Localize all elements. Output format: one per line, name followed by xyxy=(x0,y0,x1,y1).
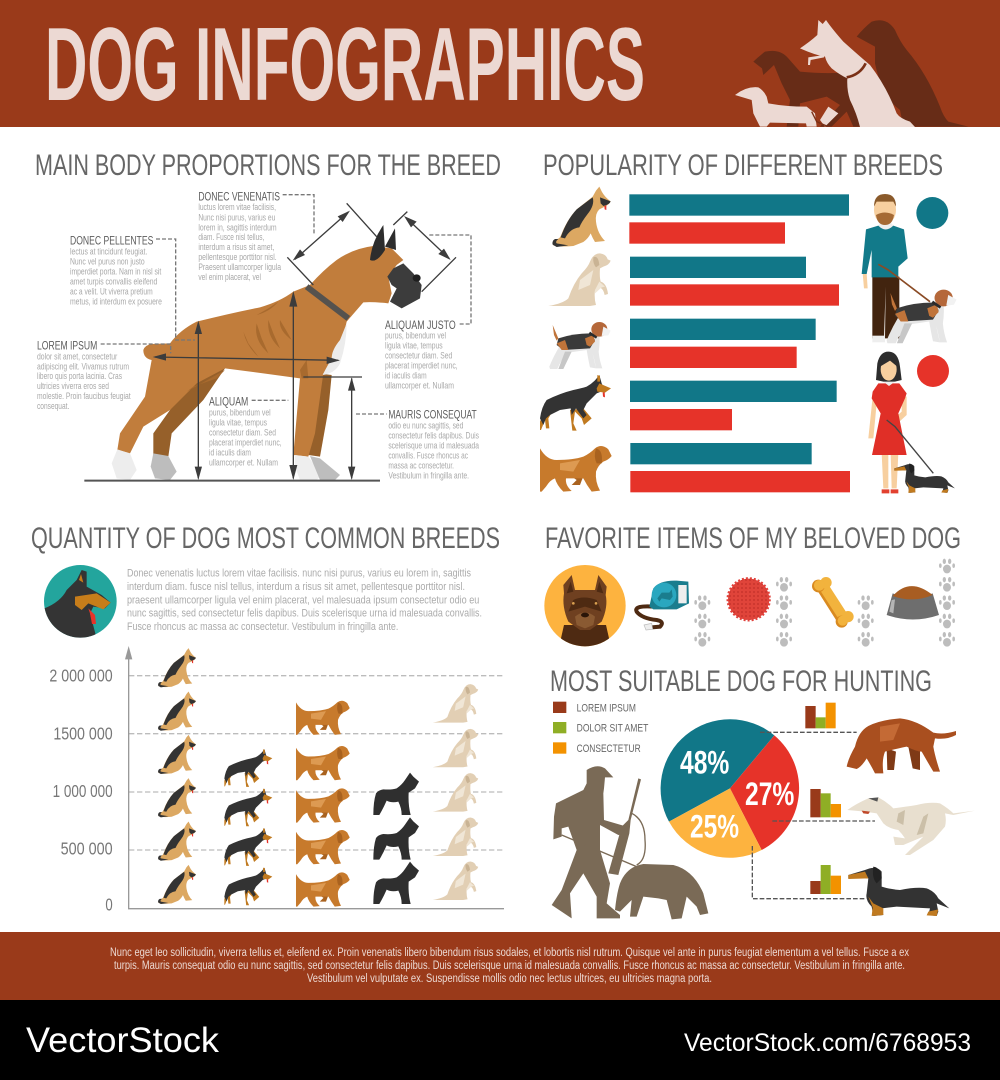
callout: aliquam justo: id iaculis diam xyxy=(385,370,427,380)
mini bar chart: greyhound xyxy=(810,789,841,817)
icon: doberman head xyxy=(40,565,117,640)
callout: mauris consequat: scelerisque urna id malesuada xyxy=(388,440,479,450)
callout: lorem ipsum xyxy=(37,339,131,411)
callout: aliquam: id iaculis diam xyxy=(209,447,251,457)
callout: donec pellentes: Nunc vel purus non justo xyxy=(70,256,145,266)
panel: body proportions diagram xyxy=(37,191,479,481)
panel: quantity of breeds xyxy=(40,565,504,914)
callout: lorem ipsum: ultricies viverra eros sed xyxy=(37,381,109,391)
pictogram: shepherds xyxy=(158,648,196,904)
legend xyxy=(553,702,648,755)
axis labels: 500 000 xyxy=(61,839,113,859)
callout: aliquam justo: consectetur diam. Sed xyxy=(385,350,452,360)
pie chart: 27% xyxy=(745,775,794,812)
callout: aliquam: ullamcorper et. Nullam xyxy=(209,457,278,467)
text block: nunc sagittis, sed consectetur felis dapibus. Duis scelerisque urna id malesuada convallis. xyxy=(127,608,482,620)
footer band: Vestibulum vel vulputate ex. Suspendisse mollis odio nec lectus ultrices, eu ultricies magna porta. xyxy=(307,973,712,985)
callout: donec pellentes xyxy=(70,235,162,306)
callout: lorem ipsum: dolor sit amet, consectetur xyxy=(37,351,117,361)
watermark bar: VectorStock.com/6768953 xyxy=(684,1029,971,1057)
callout: aliquam: ALIQUAM xyxy=(209,396,248,409)
callout: donec pellentes: ac a velit. Ut viverra pretium xyxy=(70,286,153,296)
callout: aliquam: ligula vitae, tempus xyxy=(209,418,267,428)
boxer dog xyxy=(112,225,422,480)
callout: mauris consequat: odio eu nunc sagittis, sed xyxy=(388,421,463,431)
header banner xyxy=(0,0,1000,127)
legend circle: men xyxy=(916,197,948,229)
icon: dog silhouettes xyxy=(735,20,968,127)
mini bar chart: dachshund xyxy=(810,865,841,894)
callout: aliquam justo: ligula vitae, tempus xyxy=(385,340,443,350)
watermark bar: VectorStock xyxy=(26,1021,220,1060)
pie chart xyxy=(661,719,799,858)
callout: aliquam justo: purus, bibendum vel xyxy=(385,330,446,340)
callout: donec venenatis: luctus lorem vitae facilisis, xyxy=(198,202,276,212)
callout: donec venenatis: vel enim placerat, vel xyxy=(198,272,261,282)
breed icons xyxy=(540,187,612,492)
pictogram: golden retrievers xyxy=(296,701,350,907)
callout: donec pellentes: metus, id interdum ex posuere xyxy=(70,296,162,306)
callout: aliquam: purus, bibendum vel xyxy=(209,408,271,418)
callout: mauris consequat: Vestibulum in fringilla ante. xyxy=(388,470,469,480)
callout: donec venenatis: Praesent ullamcorper ligula xyxy=(198,262,281,272)
chart grid xyxy=(129,676,504,850)
callout: donec pellentes: lectus at tincidunt feugiat. xyxy=(70,246,147,256)
legend: LOREM IPSUM xyxy=(577,702,636,714)
pie chart: 25% xyxy=(690,808,739,845)
text block: Donec venenatis luctus lorem vitae facilisis. nunc nisi purus, varius eu lorem in, sagittis xyxy=(127,568,471,580)
axis labels xyxy=(49,665,113,914)
dashed leader lines xyxy=(101,195,471,414)
pictogram: dobermans xyxy=(224,749,272,905)
icon: food bowl xyxy=(887,586,939,619)
callout: lorem ipsum: molestie. Proin faucibus feugiat xyxy=(37,391,131,401)
leader lines xyxy=(752,732,875,899)
callout: lorem ipsum: consequat. xyxy=(37,401,69,411)
axis labels: 2 000 000 xyxy=(49,665,113,685)
callout: mauris consequat: MAURIS CONSEQUAT xyxy=(388,409,477,422)
callout: lorem ipsum: LOREM IPSUM xyxy=(37,339,97,352)
text block: praesent ullamcorper ligula vel enim placerat, vel malesuada ipsum consectetur odio eu xyxy=(127,594,479,606)
panel: favorite items and hunting xyxy=(544,559,975,919)
callout: aliquam justo: ALIQUAM JUSTO xyxy=(385,319,456,332)
text block: interdum diam. fusce nisl tellus, interdum a risus sit amet, pellentesque porttitor nisl. xyxy=(127,581,465,593)
panel: popularity of breeds xyxy=(540,187,957,493)
callout: donec venenatis xyxy=(198,191,281,282)
heading: quantity: QUANTITY OF DOG MOST COMMON BREEDS xyxy=(31,522,500,555)
callout: donec venenatis: Nunc nisi purus, varius eu xyxy=(198,212,275,222)
icon: red ball xyxy=(728,578,770,620)
callout: aliquam xyxy=(209,396,282,467)
text block: Fusce rhoncus ac massa ac consectetur. Vestibulum in fringilla ante. xyxy=(127,621,398,633)
callout: lorem ipsum: libero quis porta lacinia. Cras xyxy=(37,371,122,381)
heading: main body proportions: MAIN BODY PROPORTIONS FOR THE BREED xyxy=(35,149,501,182)
pie chart: 48% xyxy=(680,743,729,780)
measurement arrows xyxy=(84,203,456,481)
callout: donec pellentes: amet turpis convallis eleifend xyxy=(70,276,157,286)
icon: paw prints xyxy=(694,559,955,647)
callout: donec venenatis: DONEC VENENATIS xyxy=(198,191,280,204)
callout: lorem ipsum: adipiscing elit. Vivamus rutrum xyxy=(37,361,129,371)
callout: aliquam: consectetur diam. Sed xyxy=(209,428,276,438)
mini bar chart: setter xyxy=(805,703,836,728)
legend: DOLOR SIT AMET xyxy=(577,723,648,735)
legend: CONSECTETUR xyxy=(577,743,641,755)
callout: aliquam justo xyxy=(385,319,458,390)
woman with dachshund xyxy=(868,352,955,493)
callout: donec venenatis: lorem in, sagittis interdum xyxy=(198,222,277,232)
icon: retractable leash xyxy=(636,581,689,630)
callout: mauris consequat: massa ac consectetur. xyxy=(388,461,454,471)
dog: greyhound xyxy=(847,797,975,855)
text block xyxy=(127,568,482,633)
callout: aliquam justo: ullamcorper et. Nullam xyxy=(385,380,454,390)
callout: mauris consequat: consectetur felis dapibus. Duis xyxy=(388,430,479,440)
callout: donec venenatis: diam. Fusce nisl tellus, xyxy=(198,232,264,242)
callout: aliquam justo: placerat imperdiet nunc, xyxy=(385,360,458,370)
pictogram: cream retrievers xyxy=(433,684,478,900)
callout: mauris consequat: convallis. Fusce rhoncus ac xyxy=(388,450,468,460)
callout: donec pellentes: DONEC PELLENTES xyxy=(70,235,153,248)
icon: dog portrait xyxy=(544,565,626,650)
callout: donec venenatis: pellentesque porttitor nisl. xyxy=(198,252,277,262)
dog: dachshund xyxy=(848,867,949,916)
pictogram: schnauzers xyxy=(373,773,419,904)
callout: aliquam: placerat imperdiet nunc, xyxy=(209,437,282,447)
icon: bone xyxy=(812,577,854,628)
watermark bar xyxy=(0,1000,1000,1080)
legend circle: women xyxy=(917,355,949,387)
axis labels: 0 xyxy=(105,894,113,914)
dog: setter xyxy=(847,718,956,773)
hunter silhouette xyxy=(552,766,645,918)
bar chart xyxy=(629,194,850,492)
footer band xyxy=(0,932,1000,1000)
callout: donec pellentes: imperdiet porta. Nam in nisl sit xyxy=(70,266,162,276)
hunting dog silhouette xyxy=(615,864,708,919)
man with beagle xyxy=(862,194,957,343)
chart axes xyxy=(125,646,504,909)
callout: donec venenatis: interdum a risus sit amet, xyxy=(198,242,274,252)
callout: mauris consequat xyxy=(388,409,479,480)
axis labels: 1 000 000 xyxy=(53,781,113,801)
axis labels: 1500 000 xyxy=(53,723,113,743)
